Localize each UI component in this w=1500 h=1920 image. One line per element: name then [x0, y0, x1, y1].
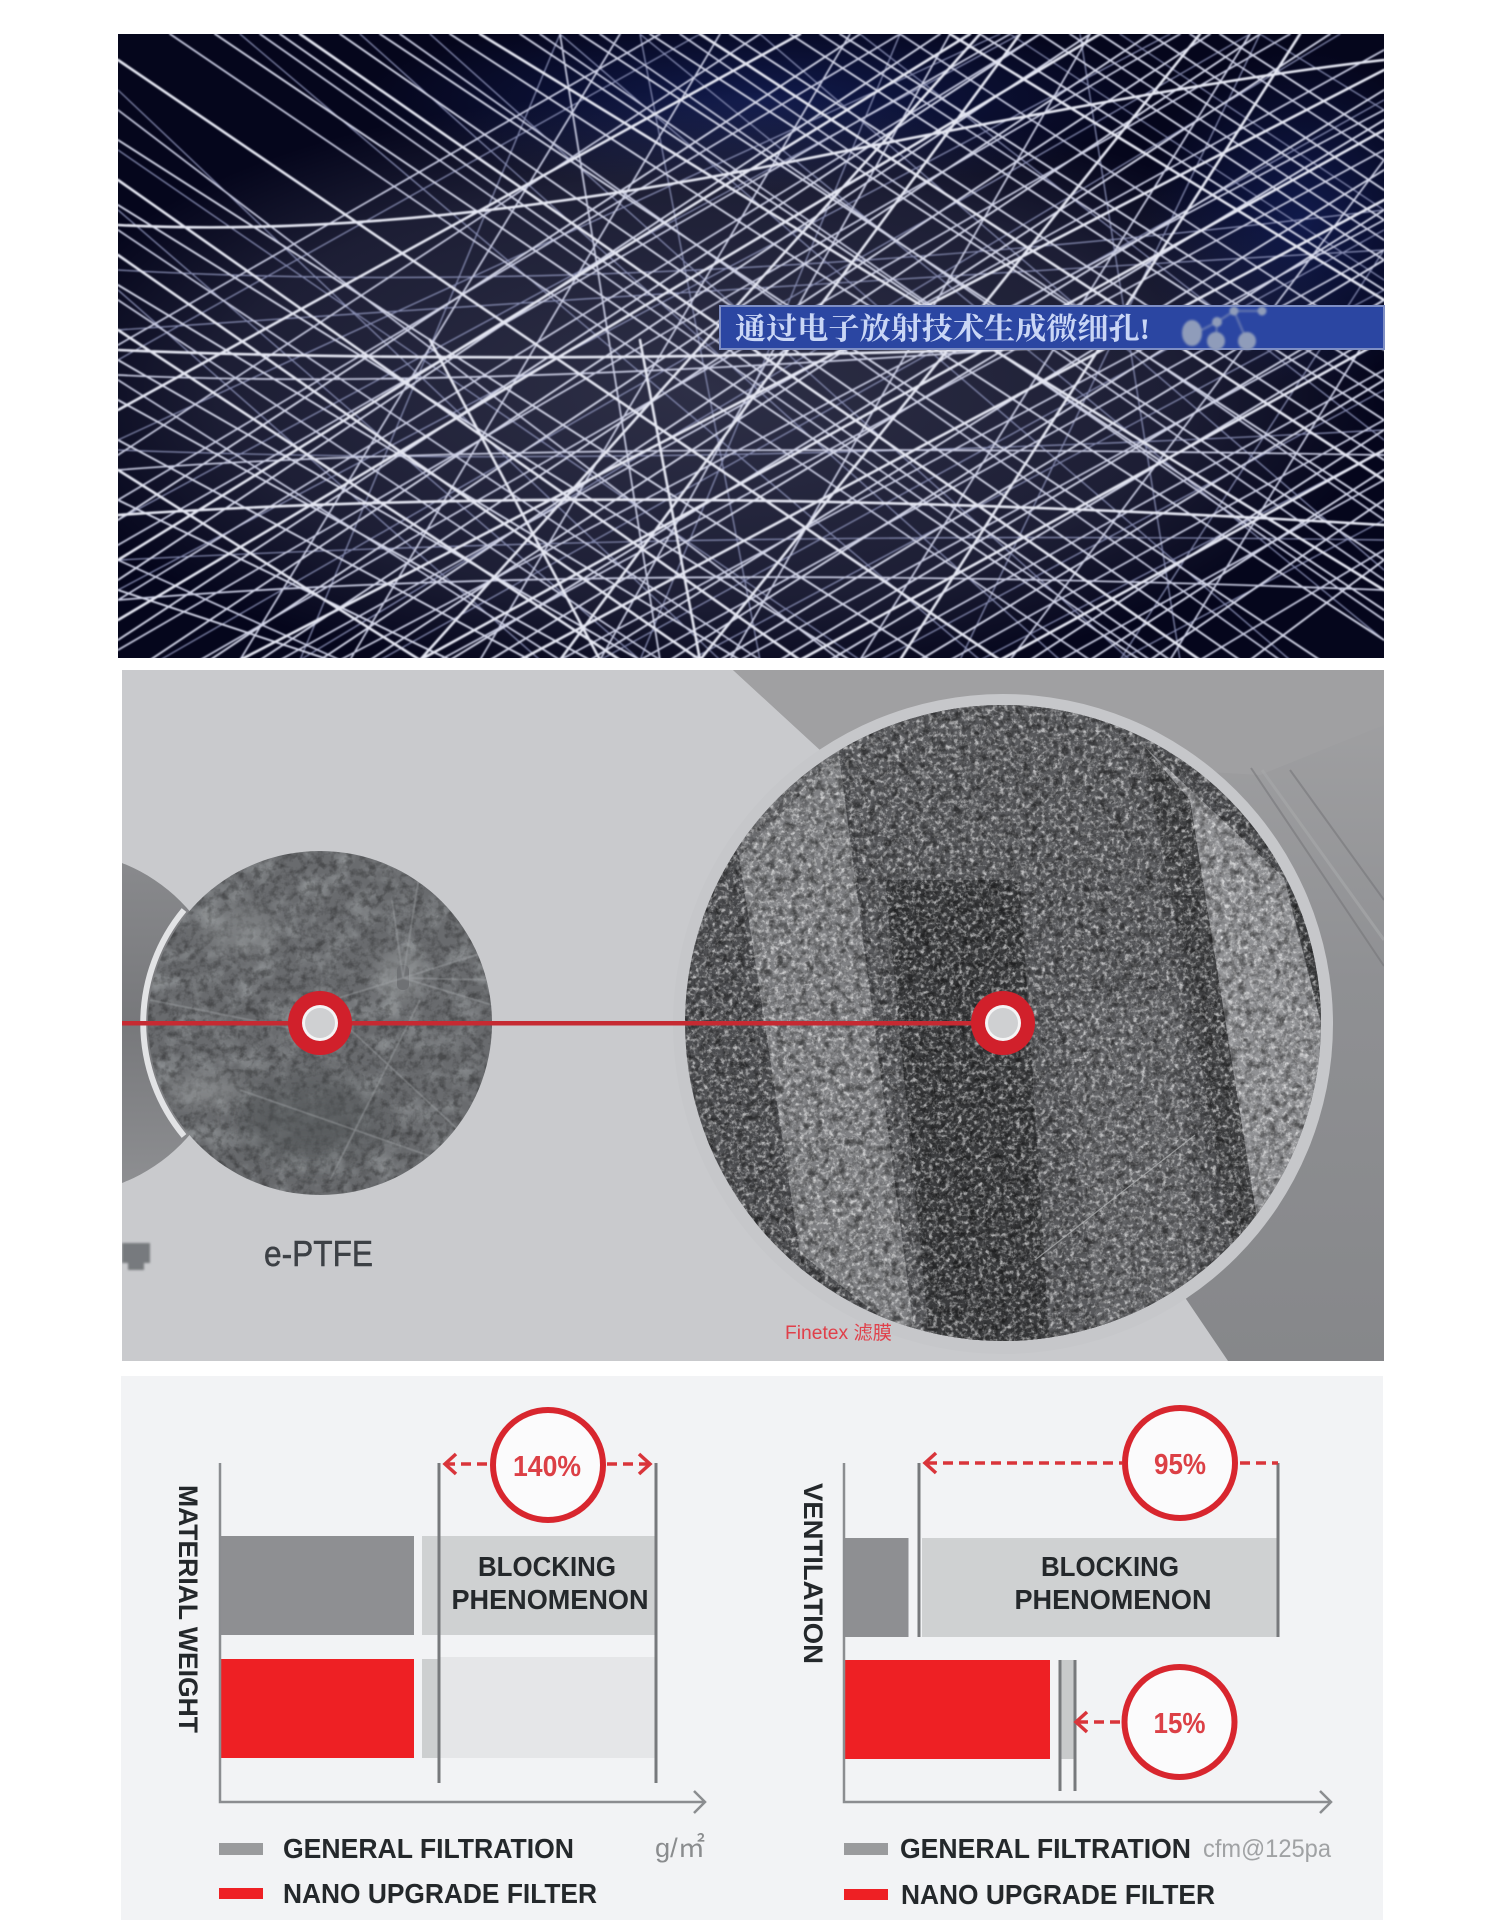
backdrop: grey filter photo behind large lens	[733, 670, 1384, 1361]
e-PTFE magnified circle	[148, 851, 492, 1195]
left partial grey circle	[122, 863, 190, 1183]
blocking label	[1014, 1551, 1212, 1615]
callout: 95%	[1125, 1408, 1235, 1518]
large lens rim	[820, 694, 1333, 1298]
icon: molecule	[1183, 308, 1266, 349]
dimension arrows	[445, 1454, 650, 1474]
y axis label: VENTILATION	[798, 1483, 828, 1664]
marker: e-PTFE	[288, 991, 352, 1055]
legend: GENERAL FILTRATION	[900, 1833, 1191, 1864]
legend: NANO UPGRADE FILTER	[283, 1878, 597, 1909]
fibre photo background	[118, 34, 1384, 658]
axes and guides	[220, 1463, 705, 1813]
legend: GENERAL FILTRATION	[283, 1833, 574, 1864]
callout: 140%	[493, 1410, 603, 1520]
blocking label: BLOCKING	[1041, 1551, 1179, 1582]
bars	[220, 1536, 656, 1758]
label: Finetex: Finetex 滤膜	[785, 1322, 892, 1344]
callout: 15%: 15%	[1154, 1708, 1206, 1740]
blocking label: BLOCKING	[478, 1551, 616, 1582]
panel: comparison charts background	[121, 1376, 1383, 1920]
callout: 140%: 140%	[513, 1451, 581, 1483]
caption text: 通过电子放射技术生成微细孔!	[735, 313, 1150, 346]
panel: e-PTFE vs Finetex magnified comparison	[0, 670, 1384, 1361]
icon: cropped grey label fragment	[122, 1243, 150, 1270]
left lens ring	[143, 910, 184, 1136]
caption band	[720, 306, 1384, 349]
comparison line with markers	[122, 991, 1035, 1055]
legend	[219, 1833, 705, 1909]
callout: 15%	[1124, 1667, 1234, 1777]
legend: g/㎡	[655, 1833, 705, 1863]
legend: cfm@125pa	[1203, 1835, 1331, 1863]
Finetex magnified circle	[685, 700, 1325, 1345]
chart: material weight	[173, 1410, 705, 1909]
panel: nanofibre photo with caption	[118, 34, 1385, 658]
chart: ventilation	[798, 1408, 1331, 1910]
callout: 95%: 95%	[1154, 1449, 1206, 1481]
blocking label: PHENOMENON	[1014, 1584, 1212, 1615]
label: e-PTFE: e-PTFE	[264, 1233, 373, 1274]
marker: Finetex	[971, 991, 1035, 1055]
dimension arrows	[925, 1453, 1278, 1732]
blocking label: PHENOMENON	[452, 1584, 648, 1615]
axes and guides	[844, 1463, 1331, 1813]
blocking label	[452, 1551, 648, 1615]
legend: NANO UPGRADE FILTER	[901, 1879, 1215, 1910]
y axis label: MATERIAL WEIGHT	[173, 1485, 203, 1733]
bars	[845, 1538, 1277, 1759]
legend	[844, 1833, 1331, 1910]
